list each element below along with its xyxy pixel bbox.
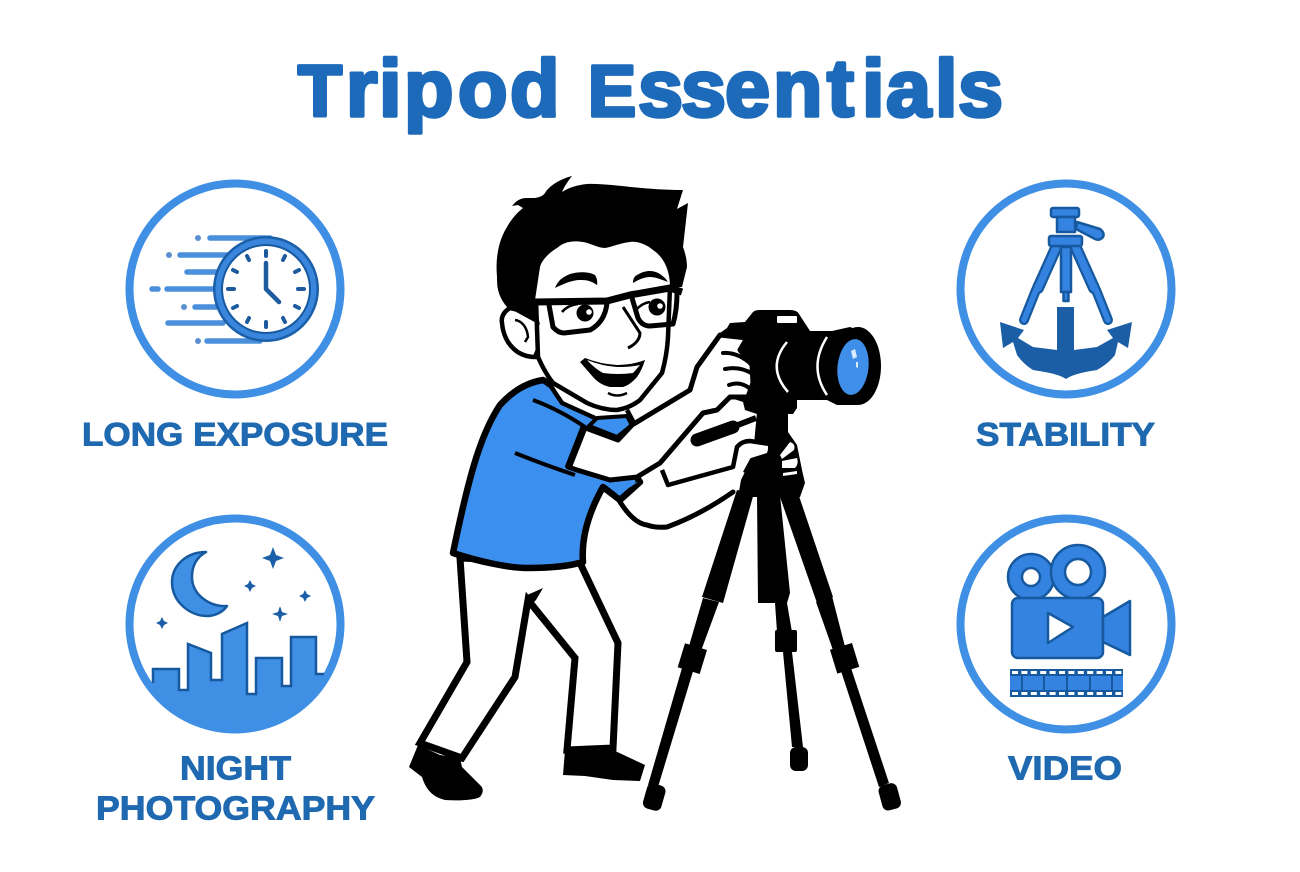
figure: chin line bbox=[608, 393, 627, 396]
label: night photography: PHOTOGRAPHY bbox=[96, 790, 375, 826]
tripod bbox=[641, 412, 902, 812]
label: long exposure: LONG EXPOSURE bbox=[82, 416, 388, 452]
camera: lens barrel bbox=[835, 327, 881, 405]
label: night photography: NIGHT bbox=[180, 750, 291, 786]
label: stability: STABILITY bbox=[976, 416, 1155, 452]
photographer with camera on tripod bbox=[409, 176, 902, 812]
figure: left shoe bbox=[409, 745, 483, 800]
figure: nose bbox=[623, 307, 640, 348]
title: ssentials bbox=[638, 44, 1003, 134]
figure: hair bbox=[497, 176, 688, 325]
figure: pan handle bbox=[697, 418, 756, 440]
label: night photography bbox=[96, 750, 375, 826]
title: T bbox=[298, 52, 342, 132]
figure: sleeve end bbox=[568, 425, 585, 468]
figure: shirt piece under arm bbox=[612, 482, 638, 495]
figure: back arm lower edge bbox=[617, 492, 733, 527]
figure: collar bbox=[589, 416, 632, 437]
camera: lens glint bbox=[851, 349, 858, 368]
figure: eyebrows bbox=[555, 271, 668, 288]
camera: lens ring highlights bbox=[777, 337, 827, 395]
figure: crotch fold bbox=[525, 588, 543, 606]
figure: mouth bbox=[580, 358, 645, 387]
figure: trousers bbox=[420, 558, 618, 758]
panel: night photography bbox=[96, 518, 375, 826]
camera bbox=[700, 310, 881, 414]
figure: face fill bbox=[535, 240, 670, 410]
figure: teeth bbox=[587, 360, 640, 374]
figure: neck bbox=[552, 370, 690, 422]
figure: ear bbox=[502, 308, 542, 357]
figure: front arm and hand bbox=[568, 335, 753, 480]
camera: viewfinder highlight bbox=[777, 316, 797, 323]
figure: jaw outline bbox=[536, 287, 670, 410]
figure: shirt fold lines bbox=[515, 400, 585, 475]
title: E bbox=[588, 52, 636, 132]
figure: glasses bbox=[535, 288, 682, 333]
figure: ear inner line bbox=[515, 320, 528, 342]
figure: finger lines bbox=[723, 353, 753, 388]
icon: moon and city skyline bbox=[130, 518, 340, 740]
title: ripod bbox=[346, 44, 582, 134]
figure: right shoe bbox=[563, 750, 645, 781]
icon: movie camera with film strip bbox=[960, 518, 1172, 730]
camera: lens glass bbox=[835, 338, 871, 396]
icon: tripod on anchor bbox=[960, 184, 1172, 394]
panel: video bbox=[960, 518, 1172, 786]
label: video: VIDEO bbox=[1008, 750, 1122, 786]
figure: neck outline bbox=[550, 385, 634, 423]
figure: second hand fingers bbox=[780, 442, 798, 476]
figure: blue shirt bbox=[453, 380, 640, 568]
panel: stability bbox=[960, 184, 1172, 452]
icon: clock with speed lines bbox=[130, 184, 340, 394]
figure: second hand bbox=[662, 428, 770, 485]
panel: long exposure bbox=[82, 184, 388, 452]
figure: eyes bbox=[576, 298, 666, 322]
